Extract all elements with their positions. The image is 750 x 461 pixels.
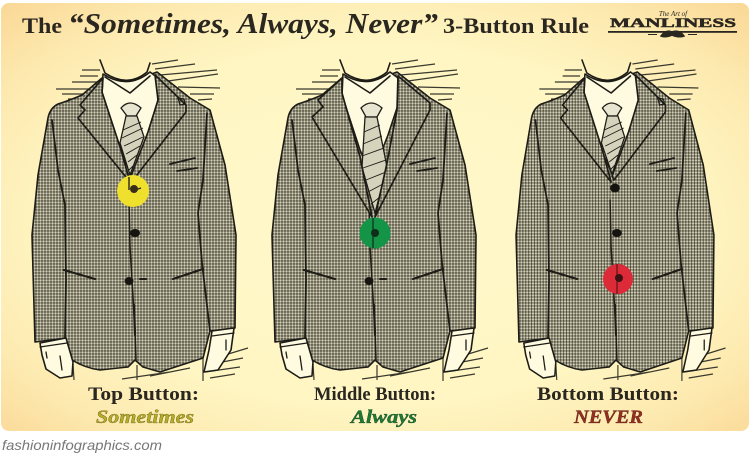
suit: middle button, always (272, 60, 488, 381)
logo: The Art of Manliness (608, 10, 737, 37)
highlight: red button (603, 264, 633, 294)
caption: middle button: Middle Button: (314, 384, 436, 405)
title: “Sometimes, Always, Never” (68, 9, 438, 40)
source credit: fashioninfographics.com (2, 437, 162, 453)
highlight: green button (360, 218, 390, 248)
caption: bottom button: Bottom Button: (537, 384, 679, 405)
logo: The Art of Manliness: The Art of (659, 10, 688, 18)
button (612, 229, 622, 237)
title (22, 9, 589, 40)
status: sometimes: Sometimes (96, 407, 194, 428)
logo: The Art of Manliness: MANLINESS (610, 15, 736, 30)
status: never: NEVER (573, 407, 643, 428)
title: The (22, 13, 62, 38)
tie (120, 103, 144, 175)
tie (601, 103, 625, 174)
tie (361, 103, 387, 213)
button (130, 229, 140, 237)
button (365, 278, 373, 284)
caption: top button: Top Button: (88, 384, 199, 405)
lapels (78, 75, 186, 182)
lapels (561, 75, 665, 182)
highlight: yellow button (117, 175, 149, 207)
button (610, 184, 620, 192)
title: 3-Button Rule (443, 13, 589, 38)
suit: bottom button, never (516, 60, 726, 381)
status: always: Always (350, 407, 417, 428)
suit: top button, sometimes (32, 60, 248, 381)
lapels (312, 76, 430, 217)
